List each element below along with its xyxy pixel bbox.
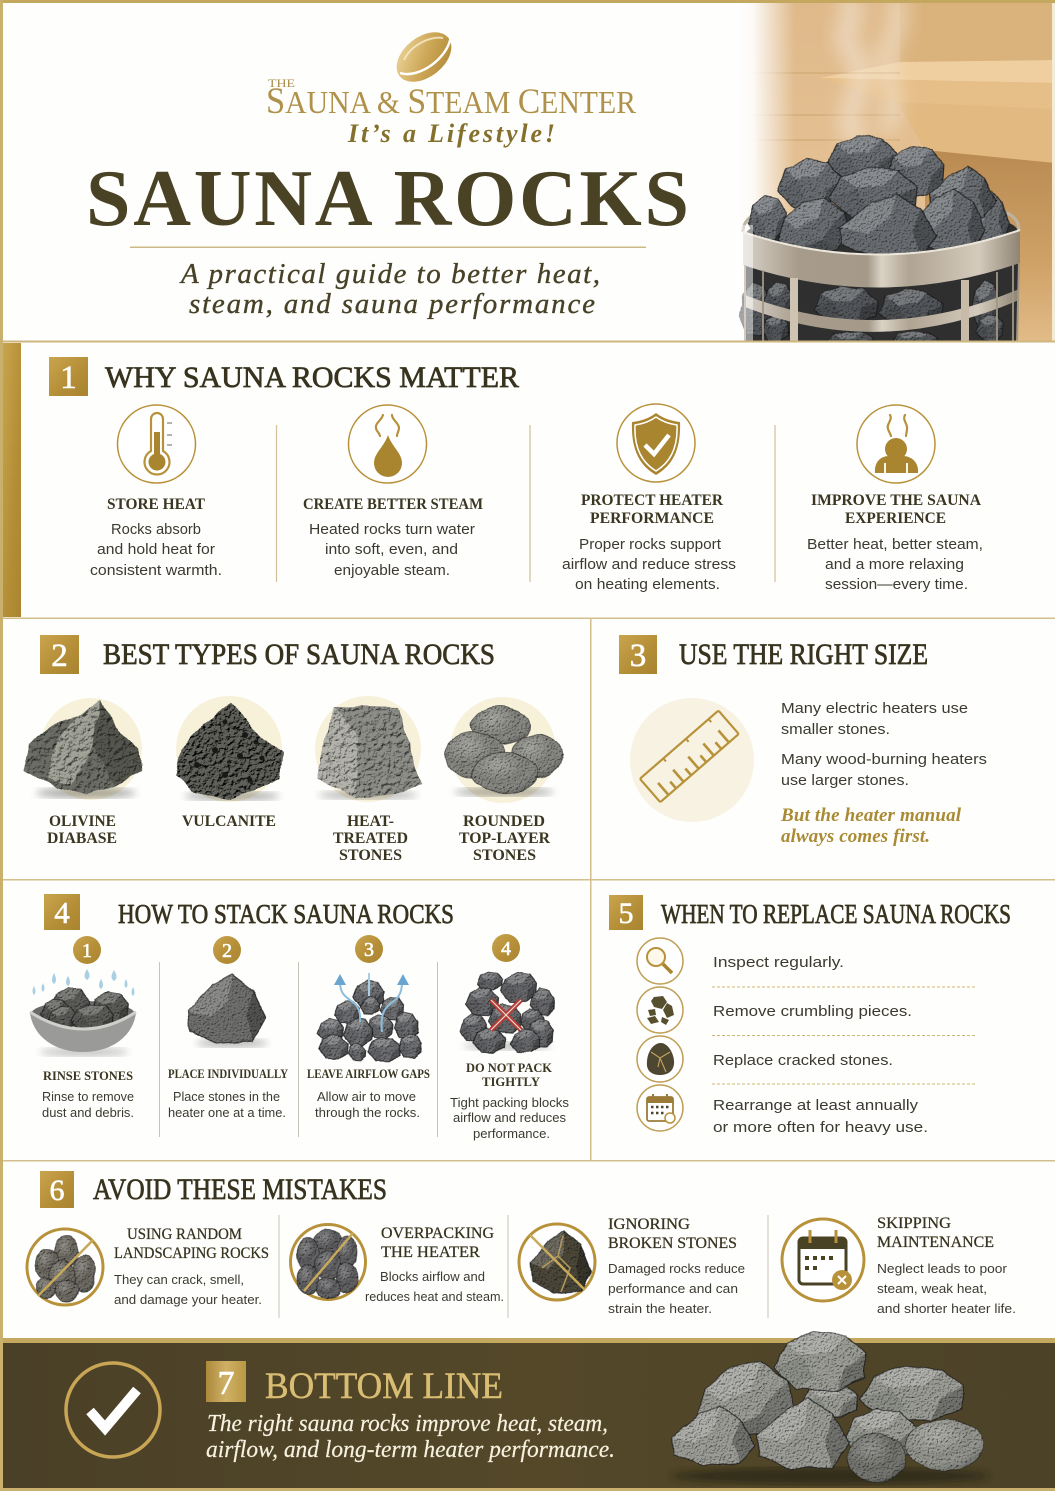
column: improve the sauna experience: session—every time. [825, 576, 968, 593]
item: crumbling [637, 987, 912, 1033]
subtitle: A practical guide to better heat, [179, 258, 600, 290]
step 2: place individually: Place stones in the [173, 1090, 280, 1104]
rock pile [670, 1331, 990, 1484]
column: store heat: consistent warmth. [90, 562, 222, 579]
column: protect heater performance: PERFORMANCE [590, 510, 714, 527]
mistake: overpacking the heater: reduces heat and steam. [365, 1290, 504, 1304]
icon: water drop with steam [348, 405, 426, 483]
text: size guidance: Many wood-burning heaters [781, 751, 987, 768]
column: improve the sauna experience: IMPROVE THE SAUNA [811, 492, 981, 509]
rock: vulcanite [176, 703, 283, 830]
item: rearrange: Rearrange at least annually [713, 1097, 919, 1114]
badge 5: 5 [618, 897, 634, 930]
badge 2: 2 [51, 638, 68, 674]
icon: calendar with x [782, 1219, 864, 1301]
step 4: do not pack tightly: DO NOT PACK [466, 1060, 553, 1075]
mistake: ignoring broken stones: Damaged rocks reduce [608, 1262, 745, 1276]
badge 1: 1 [60, 360, 77, 396]
mistake: random landscaping rocks: USING RANDOM [127, 1226, 242, 1243]
rock: heat-treated stones: HEAT- [347, 813, 394, 830]
mistake: random landscaping rocks: and damage your heater. [114, 1293, 262, 1307]
mistake: ignoring broken stones: strain the heater. [608, 1302, 712, 1316]
subtitle [179, 258, 600, 320]
back of basket [745, 210, 1018, 341]
column: create better steam: CREATE BETTER STEAM [303, 496, 483, 513]
item: inspect [637, 938, 844, 984]
column: create better steam: into soft, even, and [325, 541, 458, 558]
number 1: 1 [82, 940, 92, 962]
icon: broken stone crossed out [519, 1224, 595, 1300]
lower rocks [739, 281, 1004, 349]
icon: magnifier [637, 938, 683, 984]
number 4: 4 [501, 938, 511, 960]
heading 2: BEST TYPES OF SAUNA ROCKS [103, 638, 495, 671]
text: size guidance: use larger stones. [781, 772, 909, 789]
sauna heater photo [735, 3, 1055, 349]
badge 3 [619, 635, 657, 674]
text: size guidance [781, 700, 987, 789]
number 2: 2 [222, 940, 232, 962]
step 3: leave airflow gaps [307, 935, 430, 1120]
column: store heat [90, 405, 222, 579]
column: protect heater performance: PROTECT HEATER [581, 492, 723, 509]
step 3: leave airflow gaps: through the rocks. [315, 1106, 420, 1120]
mistake: skipping maintenance [782, 1215, 1016, 1316]
panel: why sauna rocks matter [3, 343, 983, 617]
icon: relaxing person with steam [857, 405, 935, 483]
text: size guidance: smaller stones. [781, 721, 890, 738]
logo wordmark: THE [268, 76, 295, 90]
step 1: rinse stones: RINSE STONES [43, 1068, 133, 1083]
mistake: overpacking the heater: THE HEATER [381, 1244, 481, 1261]
column: protect heater performance: airflow and reduce stress [562, 556, 736, 573]
rock: olivine diabase [24, 700, 141, 847]
mistake: overpacking the heater [290, 1224, 504, 1304]
mistake: ignoring broken stones: BROKEN STONES [608, 1235, 737, 1252]
panel: how to stack sauna rocks [30, 894, 569, 1141]
heading 4: HOW TO STACK SAUNA ROCKS [118, 899, 454, 929]
text: size guidance: Many electric heaters use [781, 700, 968, 717]
number 1 [73, 936, 101, 964]
panel: best types of sauna rocks [24, 635, 562, 864]
rock: rounded top-layer stones: ROUNDED [463, 813, 545, 830]
badge 6 [40, 1171, 74, 1208]
rock: rounded top-layer stones: TOP-LAYER [459, 830, 550, 847]
badge 2 [40, 635, 79, 674]
tagline: It’s a Lifestyle! [347, 119, 555, 148]
mistake: ignoring broken stones [519, 1216, 745, 1316]
step 4: do not pack tightly: TIGHTLY [482, 1074, 541, 1089]
badge 7 [206, 1361, 246, 1402]
column: create better steam [303, 405, 483, 579]
step 3: leave airflow gaps: LEAVE AIRFLOW GAPS [307, 1066, 430, 1081]
column: create better steam: enjoyable steam. [334, 562, 450, 579]
logo mark [387, 22, 461, 92]
mistake: skipping maintenance: MAINTENANCE [877, 1234, 994, 1251]
column: create better steam: Heated rocks turn water [309, 521, 475, 538]
badge 3: 3 [630, 638, 646, 674]
badge 5 [609, 895, 643, 930]
icon: shield with check [617, 404, 695, 482]
step 3: leave airflow gaps: Allow air to move [317, 1090, 416, 1104]
heading 1: WHY SAUNA ROCKS MATTER [105, 361, 519, 394]
column: protect heater performance [562, 404, 736, 593]
mistake: ignoring broken stones: IGNORING [608, 1216, 690, 1233]
step 4: do not pack tightly: performance. [473, 1127, 550, 1141]
mistake: skipping maintenance: SKIPPING [877, 1215, 951, 1232]
logo wordmark: SAUNA & STEAM CENTER [266, 81, 637, 122]
heading 7: BOTTOM LINE [265, 1366, 503, 1407]
title: SAUNA ROCKS [86, 155, 689, 243]
badge 7: 7 [218, 1365, 234, 1402]
icon: thermometer [118, 405, 196, 483]
rock: heat-treated stones: TREATED [333, 830, 408, 847]
icon: ruler [630, 698, 754, 822]
number 2 [213, 936, 241, 964]
step 2: place individually [168, 936, 289, 1120]
rocks in basket [748, 136, 1008, 258]
icon: calendar [637, 1085, 683, 1131]
mistake: ignoring broken stones: performance and can [608, 1282, 738, 1296]
icon: crumbling pieces [637, 987, 683, 1033]
metal bands [743, 230, 1020, 288]
mistake: overpacking the heater: OVERPACKING [381, 1225, 494, 1242]
rock: rounded top-layer stones: STONES [473, 847, 536, 864]
column: store heat: STORE HEAT [107, 496, 205, 513]
step 4: do not pack tightly: Tight packing blocks [450, 1096, 569, 1110]
heading 3: USE THE RIGHT SIZE [679, 638, 928, 671]
item: cracked: Replace cracked stones. [713, 1052, 893, 1069]
column: improve the sauna experience: Better heat, better steam, [807, 536, 983, 553]
callout: heater manual: But the heater manual [780, 805, 962, 826]
badge 4 [44, 894, 80, 930]
icon: rock stack with airflow [318, 973, 422, 1061]
step 2: place individually: PLACE INDIVIDUALLY [168, 1066, 289, 1081]
subtitle: steam, and sauna performance [189, 288, 595, 320]
icon: overpacked rocks crossed out [290, 1224, 366, 1300]
rock: heat-treated stones: STONES [339, 847, 402, 864]
panel: when to replace sauna rocks [609, 895, 1011, 1136]
step 1: rinse stones [30, 936, 136, 1120]
panel: avoid these mistakes [27, 1171, 1016, 1318]
step 4: do not pack tightly: airflow and reduces [453, 1111, 566, 1125]
mistake: random landscaping rocks: LANDSCAPING ROCKS [114, 1245, 269, 1262]
rock: rounded top-layer stones [445, 707, 562, 864]
item: rearrange: or more often for heavy use. [713, 1119, 928, 1136]
badge 6: 6 [50, 1174, 64, 1207]
mistake: overpacking the heater: Blocks airflow and [380, 1270, 485, 1284]
icon: check mark circle [66, 1363, 160, 1457]
rock: olivine diabase: DIABASE [47, 830, 117, 847]
item: rearrange [637, 1085, 928, 1136]
number 3: 3 [364, 939, 374, 961]
icon: cracked stone [637, 1036, 683, 1082]
step 1: rinse stones: Rinse to remove [42, 1090, 134, 1104]
mistake: random landscaping rocks [27, 1226, 269, 1307]
column: protect heater performance: Proper rocks support [579, 536, 722, 553]
item: cracked [637, 1036, 893, 1082]
column: improve the sauna experience: and a more relaxing [825, 556, 964, 573]
conclusion text: The right sauna rocks improve heat, steam, [207, 1411, 608, 1437]
badge 4: 4 [54, 895, 70, 930]
rock: olivine diabase: OLIVINE [49, 813, 116, 830]
conclusion text: airflow, and long-term heater performance. [206, 1437, 615, 1463]
rock: heat-treated stones [316, 706, 420, 864]
step 1: rinse stones: dust and debris. [42, 1106, 134, 1120]
callout: heater manual: always comes first. [781, 826, 930, 847]
step 2: place individually: heater one at a time. [168, 1106, 286, 1120]
steam [845, 3, 900, 138]
icon: water droplets [32, 969, 134, 996]
badge 1 [49, 357, 88, 396]
mistake: skipping maintenance: Neglect leads to poor [877, 1262, 1007, 1276]
callout: heater manual [780, 805, 962, 847]
column: improve the sauna experience: EXPERIENCE [845, 510, 946, 527]
item: inspect: Inspect regularly. [713, 954, 844, 971]
panel: bottom line [0, 1331, 1055, 1491]
column: protect heater performance: on heating elements. [575, 576, 720, 593]
item: crumbling: Remove crumbling pieces. [713, 1003, 912, 1020]
column: store heat: Rocks absorb [111, 521, 201, 538]
icon: single rock [187, 974, 268, 1047]
panel: use the right size [619, 635, 987, 847]
column: store heat: and hold heat for [97, 541, 215, 558]
number 3 [355, 935, 383, 963]
number 4 [492, 934, 520, 962]
icon: landscaping rocks crossed out [27, 1229, 103, 1305]
mistake: random landscaping rocks: They can crack, smell, [114, 1273, 244, 1287]
mistake: skipping maintenance: steam, weak heat, [877, 1282, 987, 1296]
icon: tight rock pile with red x [461, 972, 554, 1053]
header panel [86, 3, 1055, 349]
column: improve the sauna experience [807, 405, 983, 593]
mistake: skipping maintenance: and shorter heater life. [877, 1302, 1016, 1316]
heading 6: AVOID THESE MISTAKES [93, 1173, 387, 1206]
cream backdrops [40, 696, 556, 803]
icon: bowl of rocks [30, 988, 136, 1056]
conclusion text [206, 1411, 615, 1463]
rock: vulcanite: VULCANITE [182, 813, 276, 830]
step 4: do not pack tightly [450, 934, 569, 1141]
